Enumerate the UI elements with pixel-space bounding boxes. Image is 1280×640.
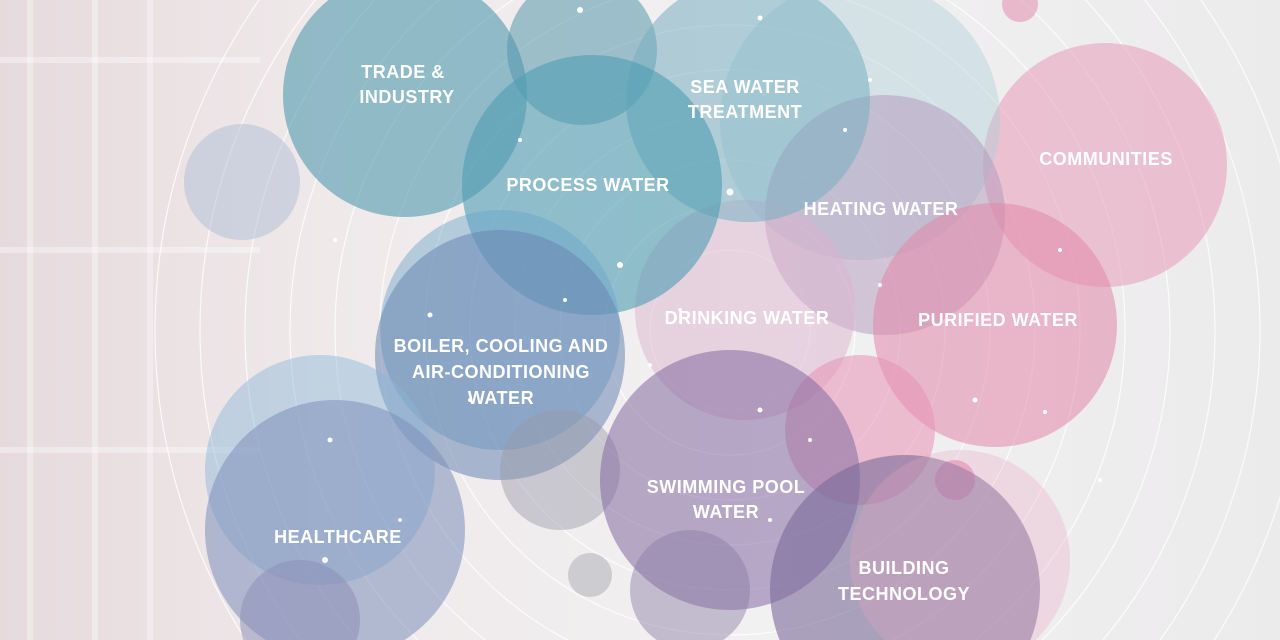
labels: WATER [468, 388, 534, 408]
label: heating water: HEATING WATER [804, 199, 958, 219]
label: sea water treatment: SEA WATER [690, 77, 800, 97]
labels: TECHNOLOGY [838, 584, 970, 604]
label: drinking water: DRINKING WATER [665, 308, 829, 328]
label: boiler: BOILER, COOLING AND [394, 336, 608, 356]
label: communities: COMMUNITIES [1039, 149, 1173, 169]
label: healthcare: HEALTHCARE [274, 527, 402, 547]
stars [322, 7, 1102, 563]
labels: TREATMENT [688, 102, 802, 122]
label: purified water: PURIFIED WATER [918, 310, 1078, 330]
labels [274, 62, 1173, 604]
label: process water: PROCESS WATER [506, 175, 670, 195]
labels: AIR-CONDITIONING [412, 362, 590, 382]
label: trade & industry: TRADE & [361, 62, 445, 82]
labels: WATER [693, 502, 759, 522]
label: building technology: BUILDING [858, 558, 950, 578]
labels: INDUSTRY [359, 87, 455, 107]
label: swimming pool: SWIMMING POOL [647, 477, 805, 497]
